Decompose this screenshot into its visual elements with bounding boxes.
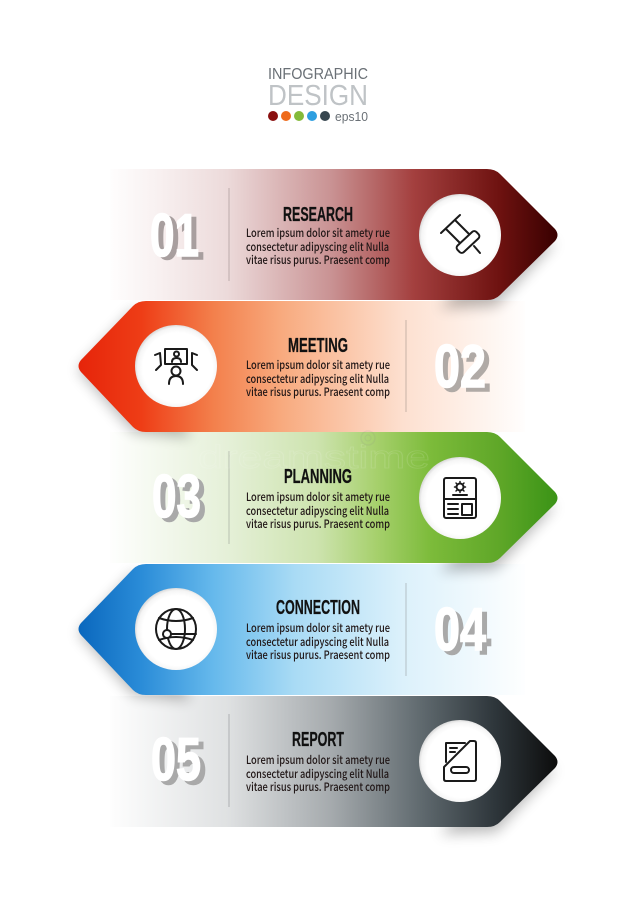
band 1: research (110, 169, 558, 308)
arrow shape (78, 301, 525, 432)
body text (246, 489, 390, 532)
body text: vitae risus purus. Praesent comp (246, 384, 390, 400)
body text: Lorem ipsum dolor sit amety rue (246, 225, 390, 241)
number 03: 03 (152, 463, 201, 530)
body text (246, 225, 390, 268)
icon: document with gear (444, 478, 476, 518)
icon circle (135, 325, 217, 407)
heading: design: DESIGN (268, 80, 368, 112)
header logo (268, 66, 368, 124)
number 05: 05 (151, 726, 201, 793)
body text: consectetur adipyscing elit Nulla (246, 371, 389, 387)
body text (246, 357, 390, 400)
title: REPORT (292, 729, 344, 751)
icon: globe (156, 609, 196, 649)
number 05: 05 (156, 730, 206, 797)
colour dots (268, 111, 330, 121)
body text: Lorem ipsum dolor sit amety rue (246, 489, 390, 505)
body text: Lorem ipsum dolor sit amety rue (246, 357, 390, 373)
number 02: 02 (434, 333, 486, 400)
body text (246, 752, 390, 795)
heading: infographic: INFOGRAPHIC (268, 66, 368, 83)
body text: Lorem ipsum dolor sit amety rue (246, 752, 390, 768)
band 4: connection (78, 564, 525, 700)
body text: consectetur adipyscing elit Nulla (246, 239, 389, 255)
body text: consectetur adipyscing elit Nulla (246, 503, 389, 519)
arrow shape (110, 696, 558, 827)
icon circle (419, 194, 501, 276)
number 04: 04 (434, 596, 486, 663)
title: PLANNING (284, 466, 352, 488)
body text: vitae risus purus. Praesent comp (246, 647, 390, 663)
arrow shape (78, 564, 525, 695)
eps label: eps10 (335, 109, 368, 124)
body text: Lorem ipsum dolor sit amety rue (246, 620, 390, 636)
arrow shape (110, 432, 558, 563)
body text: vitae risus purus. Praesent comp (246, 779, 390, 795)
band 2: meeting (78, 301, 525, 437)
icon: push pin (441, 215, 481, 254)
body text: consectetur adipyscing elit Nulla (246, 634, 389, 650)
number 01: 01 (150, 202, 199, 269)
band 5: report (110, 696, 558, 834)
number 03: 03 (157, 467, 206, 534)
number 01: 01 (155, 205, 204, 272)
number 04: 04 (439, 600, 491, 667)
body text: consectetur adipyscing elit Nulla (246, 766, 389, 782)
band 3: planning (110, 432, 558, 571)
icon: folder document (444, 741, 476, 781)
watermark: dreamstime (198, 439, 430, 475)
arrow shape (110, 169, 558, 300)
body text: vitae risus purus. Praesent comp (246, 516, 390, 532)
icon circle (419, 457, 501, 539)
icon circle (135, 588, 217, 670)
title: CONNECTION (276, 597, 360, 619)
title: RESEARCH (283, 204, 353, 226)
title: MEETING (288, 335, 348, 357)
number 02: 02 (439, 337, 491, 404)
body text: vitae risus purus. Praesent comp (246, 252, 390, 268)
icon circle (419, 720, 501, 802)
body text (246, 620, 390, 663)
icon: video meeting (155, 349, 197, 384)
watermark (198, 431, 430, 475)
